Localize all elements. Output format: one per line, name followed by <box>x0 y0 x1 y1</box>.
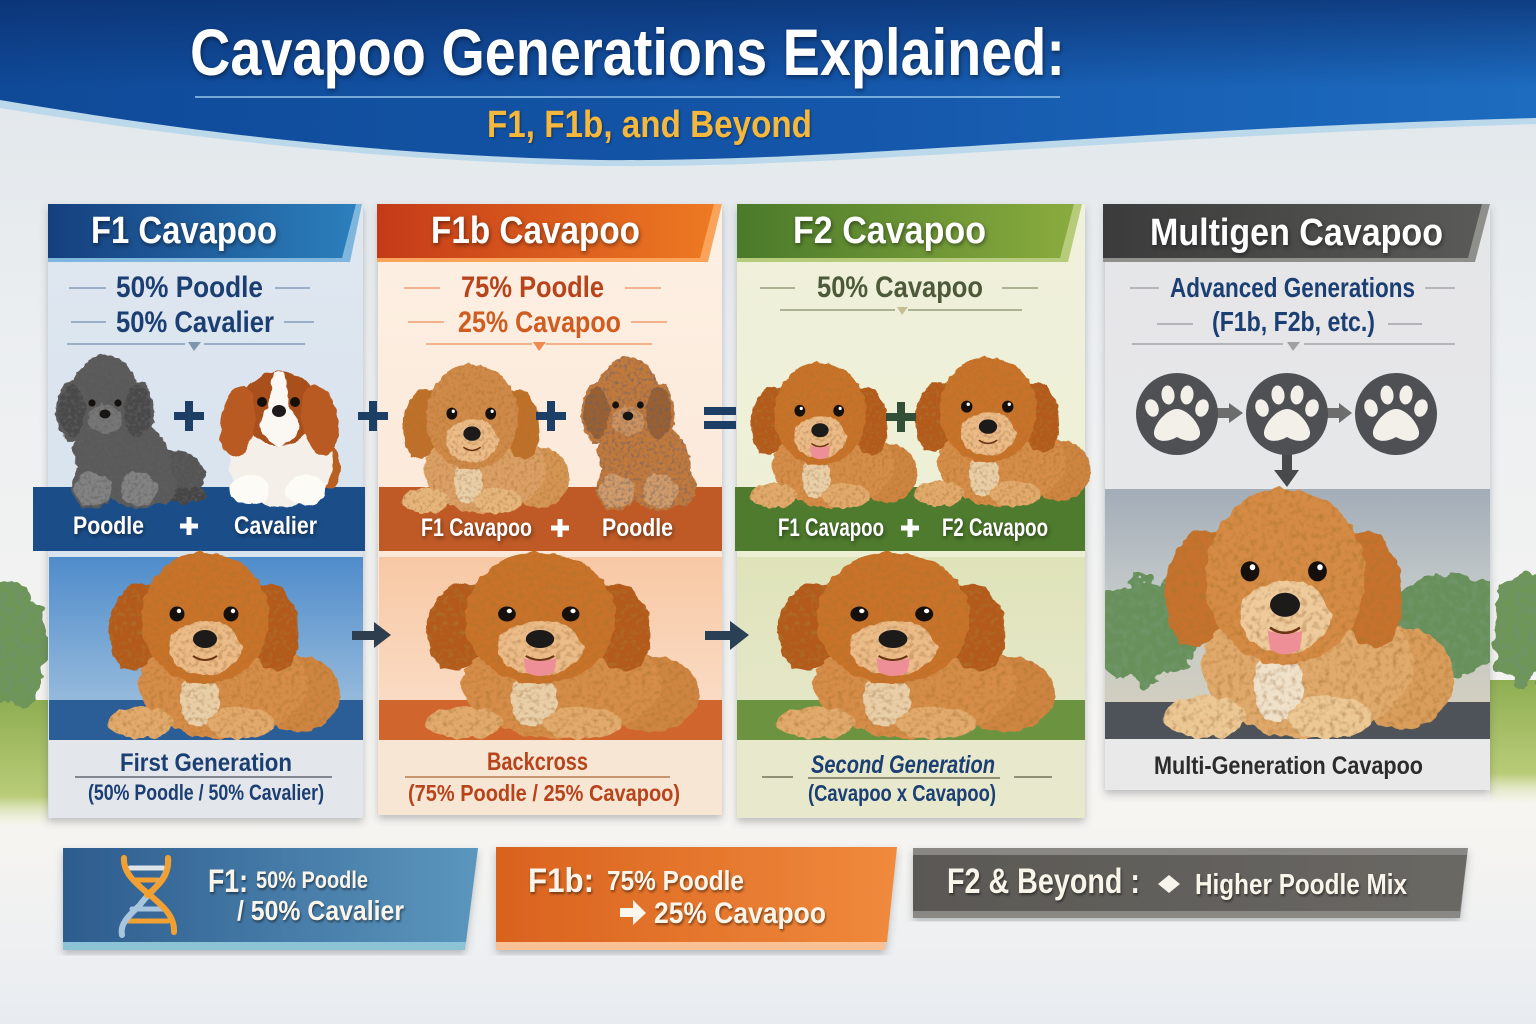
F1b percentages: 75% Poodle <box>461 271 604 304</box>
F2 parents label band: F1 Cavapoo <box>778 514 884 542</box>
connector: equals sign <box>704 411 736 425</box>
background: left foliage <box>0 583 49 828</box>
F1b percentages <box>404 271 667 351</box>
connector: plus between F1 and F1b <box>358 401 388 431</box>
F1b caption: Backcross <box>487 748 588 776</box>
panel: F1 Cavapoo <box>33 204 365 818</box>
F2 caption <box>737 740 1085 818</box>
F2 percentages <box>760 271 1038 315</box>
Multigen description: (F1b, F2b, etc.) <box>1212 306 1375 337</box>
dog: F1 cavapoo <box>747 362 917 508</box>
Multigen heading bar: Multigen Cavapoo <box>1150 212 1443 254</box>
Multigen puppy photo <box>1085 488 1510 739</box>
F1b caption <box>380 740 721 815</box>
dog: apricot poodle <box>581 357 696 511</box>
F1 percentages <box>67 271 314 351</box>
F2 legend text <box>947 862 1407 901</box>
F1b puppy photo <box>379 552 722 740</box>
F1b caption: (75% Poodle / 25% Cavapoo) <box>408 780 680 806</box>
dog: cavalier <box>216 371 344 507</box>
F1 legend text: / 50% Cavalier <box>237 895 404 926</box>
legend: F2 and beyond <box>913 848 1468 918</box>
F2 caption: (Cavapoo x Cavapoo) <box>808 780 996 806</box>
F1 parents label band: Poodle <box>73 512 144 540</box>
paw icon 3 <box>1355 373 1437 455</box>
F1 legend text <box>208 863 404 926</box>
dog: F2 cavapoo <box>911 357 1091 507</box>
Multigen caption: Multi-Generation Cavapoo <box>1154 752 1423 780</box>
arrow: F1 to F1b <box>352 622 391 648</box>
F1 legend text: F1: <box>208 863 248 899</box>
F1b heading bar <box>377 204 722 262</box>
generation flow diagram <box>1136 373 1437 487</box>
plus sign <box>536 401 566 431</box>
icon: DNA helix <box>122 858 174 935</box>
paw icon 1 <box>1136 373 1218 455</box>
F1b parents label band: F1 Cavapoo <box>421 514 532 542</box>
F1 legend text: 50% Poodle <box>256 867 368 894</box>
F2 parents label band: F2 Cavapoo <box>942 514 1048 542</box>
paw icon 2 <box>1246 373 1328 455</box>
background: right foliage <box>1490 572 1536 805</box>
F1b legend text <box>528 862 826 930</box>
flow arrow 2 <box>1327 403 1352 423</box>
Multigen heading bar <box>1103 204 1490 262</box>
subtitle: F1, F1b, and Beyond <box>487 104 812 146</box>
F2 caption: Second Generation <box>811 751 995 779</box>
panel: F1b Cavapoo <box>377 204 722 815</box>
flow arrow down <box>1274 452 1299 487</box>
F2 heading bar: F2 Cavapoo <box>793 210 986 252</box>
title: Cavapoo Generations Explained: <box>190 15 1065 89</box>
F1 puppy photo <box>49 552 363 740</box>
F1b parents label band <box>379 487 722 551</box>
F1 parents label band: Cavalier <box>234 512 317 540</box>
F1 heading bar <box>48 204 362 262</box>
F1b legend text: 75% Poodle <box>607 865 744 896</box>
F1 percentages: 50% Poodle <box>116 271 263 304</box>
F2 puppy photo <box>737 552 1085 740</box>
F2 percentages: 50% Cavapoo <box>817 271 983 304</box>
dog: F1 cavapoo <box>399 364 569 514</box>
panel: F2 Cavapoo <box>735 204 1091 818</box>
header banner <box>0 0 1536 166</box>
F1 parents label band <box>33 487 365 551</box>
F2 legend text: F2 & Beyond : <box>947 862 1140 901</box>
F1b heading bar: F1b Cavapoo <box>431 210 640 252</box>
plus sign <box>174 401 204 431</box>
F2 parents label band <box>735 487 1085 551</box>
legend: F1 <box>63 848 478 950</box>
F1 caption <box>49 740 363 818</box>
F1 heading bar: F1 Cavapoo <box>91 210 277 252</box>
F2 heading bar <box>737 204 1082 262</box>
legend: F1b <box>496 847 897 950</box>
Multigen description <box>1130 272 1455 351</box>
F1b legend text: F1b: <box>528 862 594 900</box>
F1b percentages: 25% Cavapoo <box>458 306 621 339</box>
plus sign <box>886 402 916 432</box>
flow arrow 1 <box>1217 403 1243 423</box>
Multigen description: Advanced Generations <box>1170 272 1415 303</box>
F2 legend text: Higher Poodle Mix <box>1195 869 1407 901</box>
Multigen caption <box>1105 739 1490 790</box>
F1 percentages: 50% Cavalier <box>116 306 274 339</box>
panel: Multigen Cavapoo <box>1085 204 1510 790</box>
F1 caption: First Generation <box>120 749 292 777</box>
F1b legend text: 25% Cavapoo <box>654 897 826 930</box>
arrow: F1b to F2 <box>705 621 749 650</box>
F1b parents label band: Poodle <box>602 514 673 542</box>
F1 caption: (50% Poodle / 50% Cavalier) <box>88 780 324 805</box>
dog: grey poodle <box>56 355 207 509</box>
